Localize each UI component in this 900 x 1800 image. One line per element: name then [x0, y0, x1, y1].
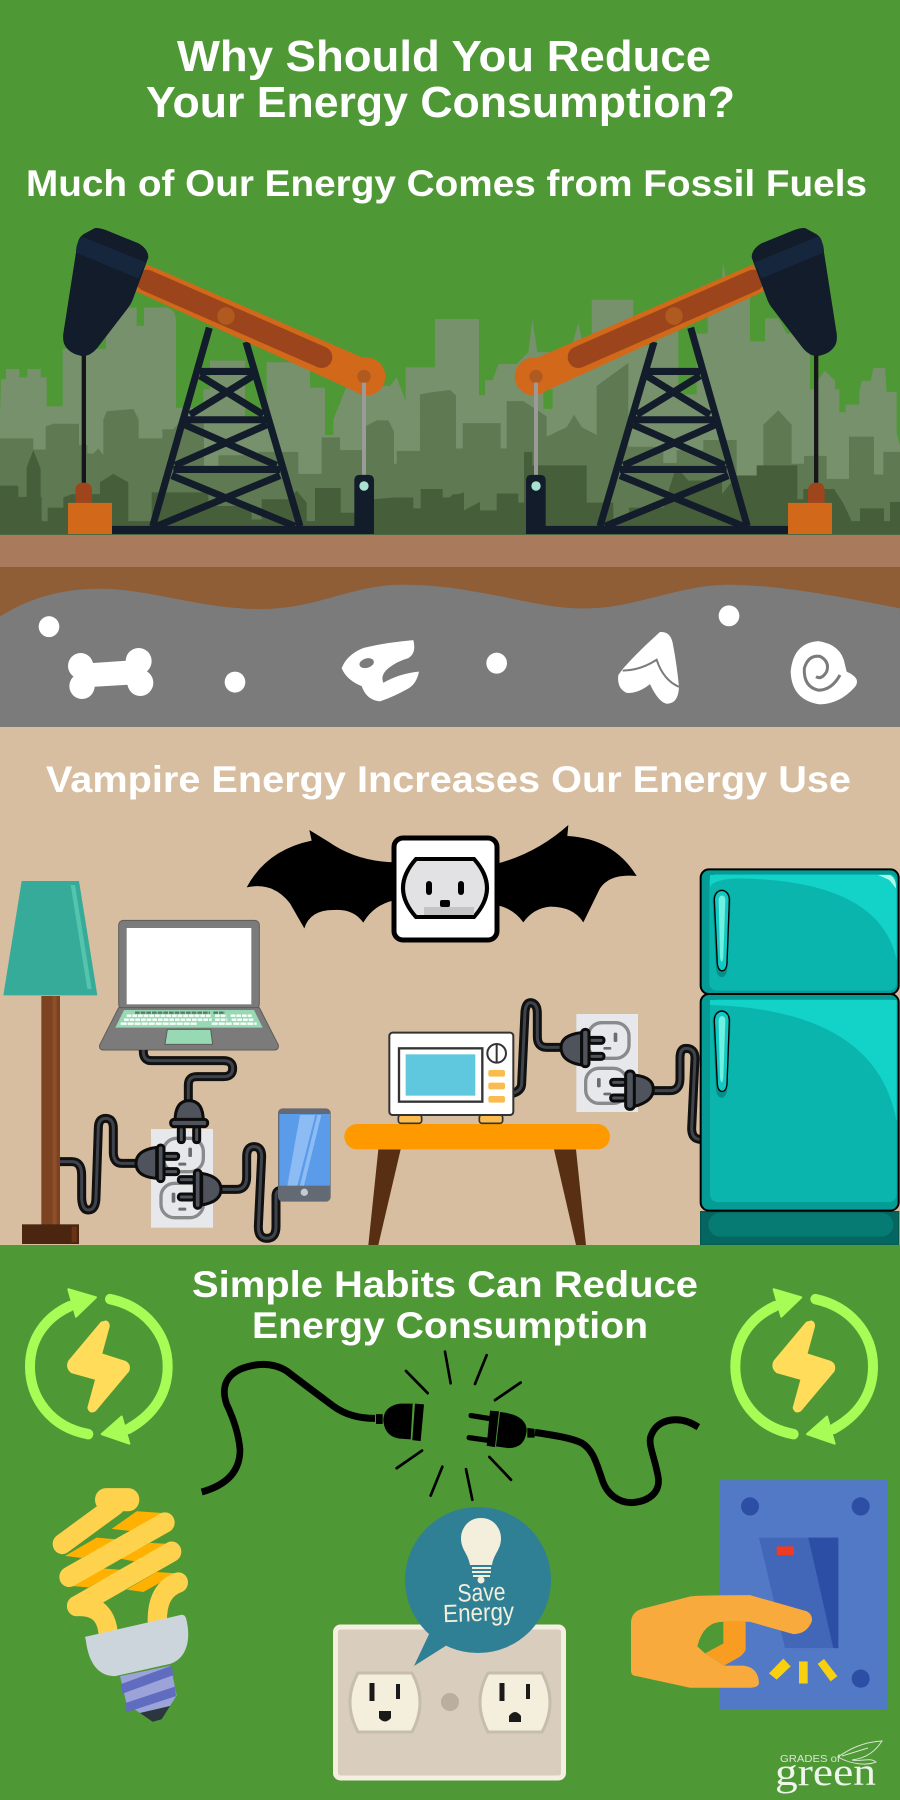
icon: renewable energy right — [735, 1289, 873, 1444]
speech bubble: save energy — [405, 1507, 551, 1666]
wall outlet right — [576, 1014, 638, 1112]
logo: grades of green: GRADES of — [780, 1754, 840, 1765]
icon: cfl bulb — [62, 1500, 188, 1722]
refrigerator — [701, 869, 899, 1245]
sediment dots right — [486, 605, 739, 674]
bubble text: Save — [457, 1578, 506, 1608]
wall outlet plate — [336, 1627, 564, 1778]
heading: vampire energy: Vampire Energy Increases Our Energy Use — [46, 759, 851, 800]
heading: simple habits — [192, 1264, 698, 1346]
power cables left — [60, 1050, 280, 1238]
plugs left — [136, 1101, 221, 1208]
heading: simple habits: Simple Habits Can Reduce — [192, 1264, 698, 1305]
panel: simple habits — [0, 1245, 900, 1800]
rods and posts — [68, 356, 374, 534]
oil pump left — [63, 228, 385, 534]
beam — [136, 264, 385, 395]
power cable: fridge — [653, 1048, 701, 1139]
icon: light bulb — [461, 1518, 501, 1584]
icon: renewable energy left — [30, 1289, 168, 1444]
panel: vampire energy — [0, 727, 900, 1245]
bubble text — [442, 1578, 515, 1628]
icon: hand — [631, 1595, 812, 1688]
skull — [342, 640, 419, 701]
wall outlet left — [151, 1129, 213, 1228]
oil pump right — [515, 228, 837, 534]
power cable: microwave — [510, 1003, 563, 1094]
spark rays — [397, 1352, 521, 1500]
logo: grades of green: green — [775, 1751, 876, 1794]
logo: grades of green — [775, 1741, 882, 1794]
bat wings — [247, 825, 637, 928]
horsehead — [63, 228, 148, 356]
heading: simple habits: Energy Consumption — [252, 1305, 648, 1346]
cable: unplugged left — [202, 1364, 424, 1492]
title: Why Should You Reduce — [177, 32, 711, 81]
cable: unplugged right — [469, 1411, 698, 1503]
tower — [153, 328, 300, 526]
title: Your Energy Consumption? — [146, 78, 735, 127]
sediment dots left — [39, 616, 245, 693]
smartphone — [278, 1108, 331, 1202]
ground layers — [0, 535, 900, 727]
fossils — [39, 605, 857, 704]
base — [110, 526, 373, 534]
table — [344, 1124, 610, 1245]
laptop — [100, 920, 278, 1050]
bubble text: Energy — [443, 1598, 515, 1628]
claw fossil — [618, 632, 679, 704]
panel: fossil fuels — [0, 0, 900, 727]
floor lamp — [3, 881, 97, 1244]
heading: fossil fuels: Much of Our Energy Comes from Fossil Fuels — [26, 163, 867, 204]
plugs right — [561, 1029, 653, 1109]
fridge handles — [713, 889, 731, 1098]
vampire outlet face — [394, 838, 497, 940]
title — [146, 32, 735, 127]
ammonite shell — [791, 641, 857, 704]
bone — [68, 648, 153, 699]
city skyline — [0, 263, 900, 535]
light switch — [631, 1480, 887, 1710]
microwave — [389, 1033, 513, 1123]
